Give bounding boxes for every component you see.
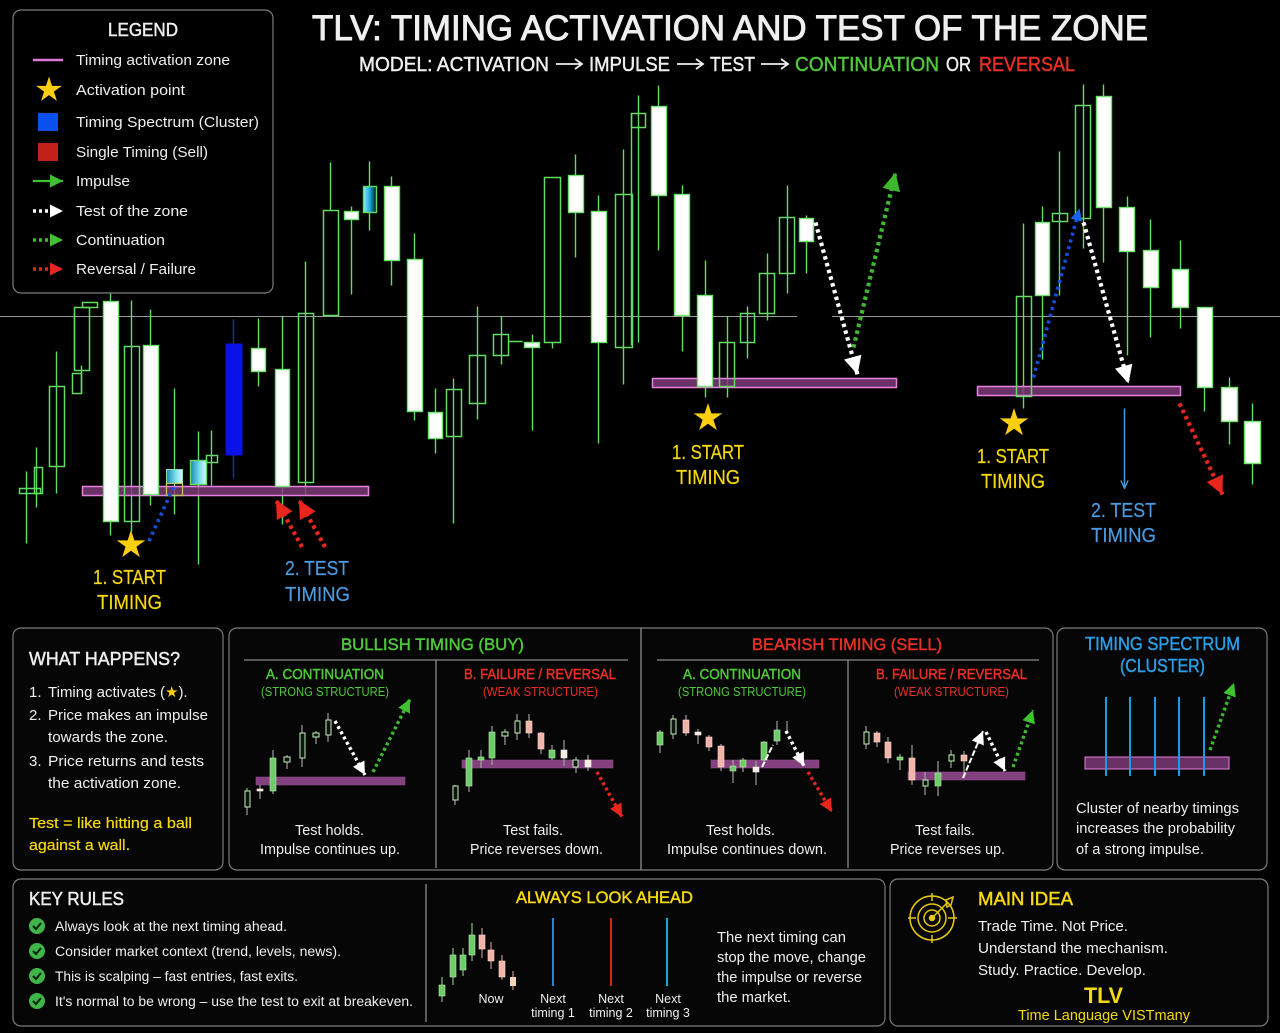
panel: timing spectrum: [1057, 628, 1267, 870]
heading: timing spectrum: TIMING SPECTRUM: [1085, 634, 1240, 654]
subtitle: OR: [946, 54, 971, 76]
timing zone: left: [82, 486, 368, 496]
timing labels: Now: [478, 992, 504, 1006]
main idea text: Study. Practice. Develop.: [978, 962, 1146, 979]
icon: star right: [1000, 408, 1028, 435]
label: start timing right: TIMING: [981, 471, 1045, 493]
main idea text: [978, 918, 1168, 979]
sub-panel: bullish continuation: (STRONG STRUCTURE): [261, 685, 389, 699]
panel: what happens: [13, 628, 223, 870]
timing labels: Next: [540, 992, 566, 1006]
sub-panel: bullish failure: [453, 667, 622, 858]
arrow: failed test 1: [276, 500, 302, 547]
chart: middle candlesticks: [428, 86, 896, 524]
legend heading: LEGEND: [108, 20, 178, 40]
main idea text: Understand the mechanism.: [978, 940, 1168, 957]
arrow: continuation, middle: [854, 172, 896, 348]
brand: TLV: [1084, 983, 1123, 1008]
timing labels: timing 3: [646, 1006, 690, 1020]
arrow: reversal, right: [1180, 404, 1222, 494]
sub-panel: bearish failure: [864, 667, 1033, 858]
sub-panel: bullish failure: Price reverses down.: [470, 842, 603, 858]
sub-panel: bullish failure: Test fails.: [503, 823, 563, 839]
rule 1: Always look at the next timing ahead.: [55, 919, 287, 934]
sub-panel: bearish failure: Price reverses up.: [890, 842, 1005, 858]
label: test timing left: 2. TEST: [285, 558, 349, 580]
legend: single timing: Single Timing (Sell): [76, 144, 208, 161]
steps list: 3.: [29, 753, 42, 770]
subtitle: CONTINUATION: [795, 54, 939, 76]
legend: impulse: Impulse: [76, 173, 130, 190]
label: start timing left: TIMING: [97, 592, 162, 614]
legend: test of the zone: Test of the zone: [76, 203, 188, 220]
arrow: to test timing: [1124, 408, 1126, 488]
cluster diagram: [1085, 683, 1234, 776]
heading: main idea: MAIN IDEA: [978, 889, 1073, 909]
legend: timing activation zone: Timing activation zone: [76, 52, 230, 69]
label: start timing left: 1. START: [93, 567, 166, 589]
price level line: [0, 316, 1280, 318]
label: start timing middle: [672, 442, 744, 489]
steps list: Timing activates (★).: [48, 684, 188, 701]
label: start timing left: [93, 567, 166, 614]
panel: key rules and look ahead: [13, 879, 885, 1026]
heading: bearish timing: BEARISH TIMING (SELL): [752, 635, 942, 654]
subtitle: REVERSAL: [979, 54, 1075, 76]
timing zone: right: [978, 386, 1180, 396]
sub-panel: bearish failure: B. FAILURE / REVERSAL: [876, 667, 1027, 683]
panel: bullish and bearish timing: [229, 628, 1053, 870]
chart: right candlesticks: [978, 84, 1260, 494]
sub-panel: bearish continuation: Impulse continues down.: [667, 842, 827, 858]
heading: timing spectrum: (CLUSTER): [1120, 656, 1205, 676]
cluster description: [1076, 801, 1239, 858]
sub-panel: bearish failure: Test fails.: [915, 823, 975, 839]
sub-panel: bearish continuation: [657, 667, 832, 858]
panel: legend: [13, 10, 273, 293]
sub-panel: bullish failure: B. FAILURE / REVERSAL: [464, 667, 616, 683]
heading: bullish timing: BULLISH TIMING (BUY): [341, 635, 524, 654]
steps list: Price returns and tests: [48, 753, 204, 770]
sub-panel: bearish continuation: (STRONG STRUCTURE): [678, 685, 806, 699]
arrow: test of zone, middle: [816, 222, 858, 374]
label: test timing left: TIMING: [285, 584, 350, 606]
look-ahead description: The next timing can: [717, 930, 846, 946]
cluster description: of a strong impulse.: [1076, 842, 1204, 858]
label: test timing right: 2. TEST: [1091, 500, 1156, 522]
rule 4: It's normal to be wrong – use the test to exit at breakeven.: [55, 994, 413, 1009]
icon: star middle: [694, 403, 722, 430]
legend: impulse: [33, 173, 130, 190]
heading: what happens: WHAT HAPPENS?: [29, 649, 180, 669]
arrow: impulse, right: [1034, 208, 1080, 378]
sub-panel: bullish continuation: A. CONTINUATION: [266, 667, 384, 683]
steps list: Price makes an impulse: [48, 707, 208, 724]
chart: left candlesticks: [20, 162, 422, 564]
look-ahead description: stop the move, change: [717, 950, 866, 966]
legend: reversal: Reversal / Failure: [76, 261, 196, 278]
sub-panel: bearish continuation: A. CONTINUATION: [683, 667, 801, 683]
sub-panel: bullish continuation: [245, 667, 410, 858]
arrow: failed test 2: [299, 500, 325, 547]
timing lines: [553, 918, 667, 986]
note: test analogy: against a wall.: [29, 837, 130, 854]
note: test analogy: [29, 815, 192, 854]
mini chart: now: [439, 923, 516, 1002]
steps list: 1.: [29, 684, 42, 701]
legend: timing spectrum: Timing Spectrum (Cluster): [76, 114, 259, 131]
timing labels: timing 1: [531, 1006, 575, 1020]
steps list: 2.: [29, 707, 42, 724]
label: start timing middle: 1. START: [672, 442, 744, 464]
rule 3: This is scalping – fast entries, fast exits.: [55, 969, 298, 984]
sub-panel: bearish failure: (WEAK STRUCTURE): [894, 685, 1009, 699]
label: start timing right: 1. START: [977, 446, 1049, 468]
subtitle: IMPULSE: [589, 54, 670, 76]
steps list: towards the zone.: [48, 729, 168, 746]
brand: [1018, 983, 1191, 1024]
label: test timing right: TIMING: [1091, 525, 1156, 547]
subtitle: MODEL: ACTIVATION: [359, 54, 549, 76]
heading: key rules: KEY RULES: [29, 889, 124, 909]
cluster description: increases the probability: [1076, 821, 1236, 837]
legend: activation point: [36, 76, 186, 101]
arrow: impulse, left: [149, 486, 174, 541]
legend: continuation: Continuation: [76, 232, 165, 249]
look-ahead description: the impulse or reverse: [717, 970, 862, 986]
main idea text: Trade Time. Not Price.: [978, 918, 1128, 935]
icon: star left: [117, 530, 145, 557]
sub-panel: bearish continuation: Test holds.: [706, 823, 775, 839]
sub-panel: bullish continuation: Test holds.: [295, 823, 364, 839]
arrow: test of zone, right: [1084, 222, 1128, 384]
timing labels: Next: [655, 992, 681, 1006]
note: test analogy: Test = like hitting a ball: [29, 815, 192, 832]
label: test timing right: [1091, 500, 1156, 547]
look-ahead description: [717, 930, 866, 1006]
heading: always look ahead: ALWAYS LOOK AHEAD: [516, 888, 693, 907]
legend: continuation: [33, 232, 165, 249]
timing labels: [478, 992, 690, 1020]
timing zone: middle: [652, 378, 896, 388]
icon: target: [908, 893, 957, 943]
title: TLV: TIMING ACTIVATION AND TEST OF THE ZONE: [312, 9, 1148, 48]
panel: main idea: [890, 879, 1268, 1026]
timing labels: Next: [598, 992, 624, 1006]
sub-panel: bullish continuation: Impulse continues up.: [260, 842, 400, 858]
brand: Time Language VISTmany: [1018, 1008, 1191, 1024]
label: test timing left: [285, 558, 350, 606]
subtitle: TEST: [710, 54, 755, 76]
label: start timing middle: TIMING: [676, 467, 740, 489]
steps list: the activation zone.: [48, 775, 181, 792]
label: start timing right: [977, 446, 1049, 493]
sub-panel: bullish failure: (WEAK STRUCTURE): [483, 685, 598, 699]
look-ahead description: the market.: [717, 990, 791, 1006]
steps list: [29, 684, 208, 792]
cluster description: Cluster of nearby timings: [1076, 801, 1239, 817]
heading: timing spectrum: [1085, 634, 1240, 676]
timing labels: timing 2: [589, 1006, 633, 1020]
legend: activation point: Activation point: [76, 82, 186, 99]
rule 2: Consider market context (trend, levels, news).: [55, 944, 341, 959]
subtitle: [359, 54, 1075, 76]
